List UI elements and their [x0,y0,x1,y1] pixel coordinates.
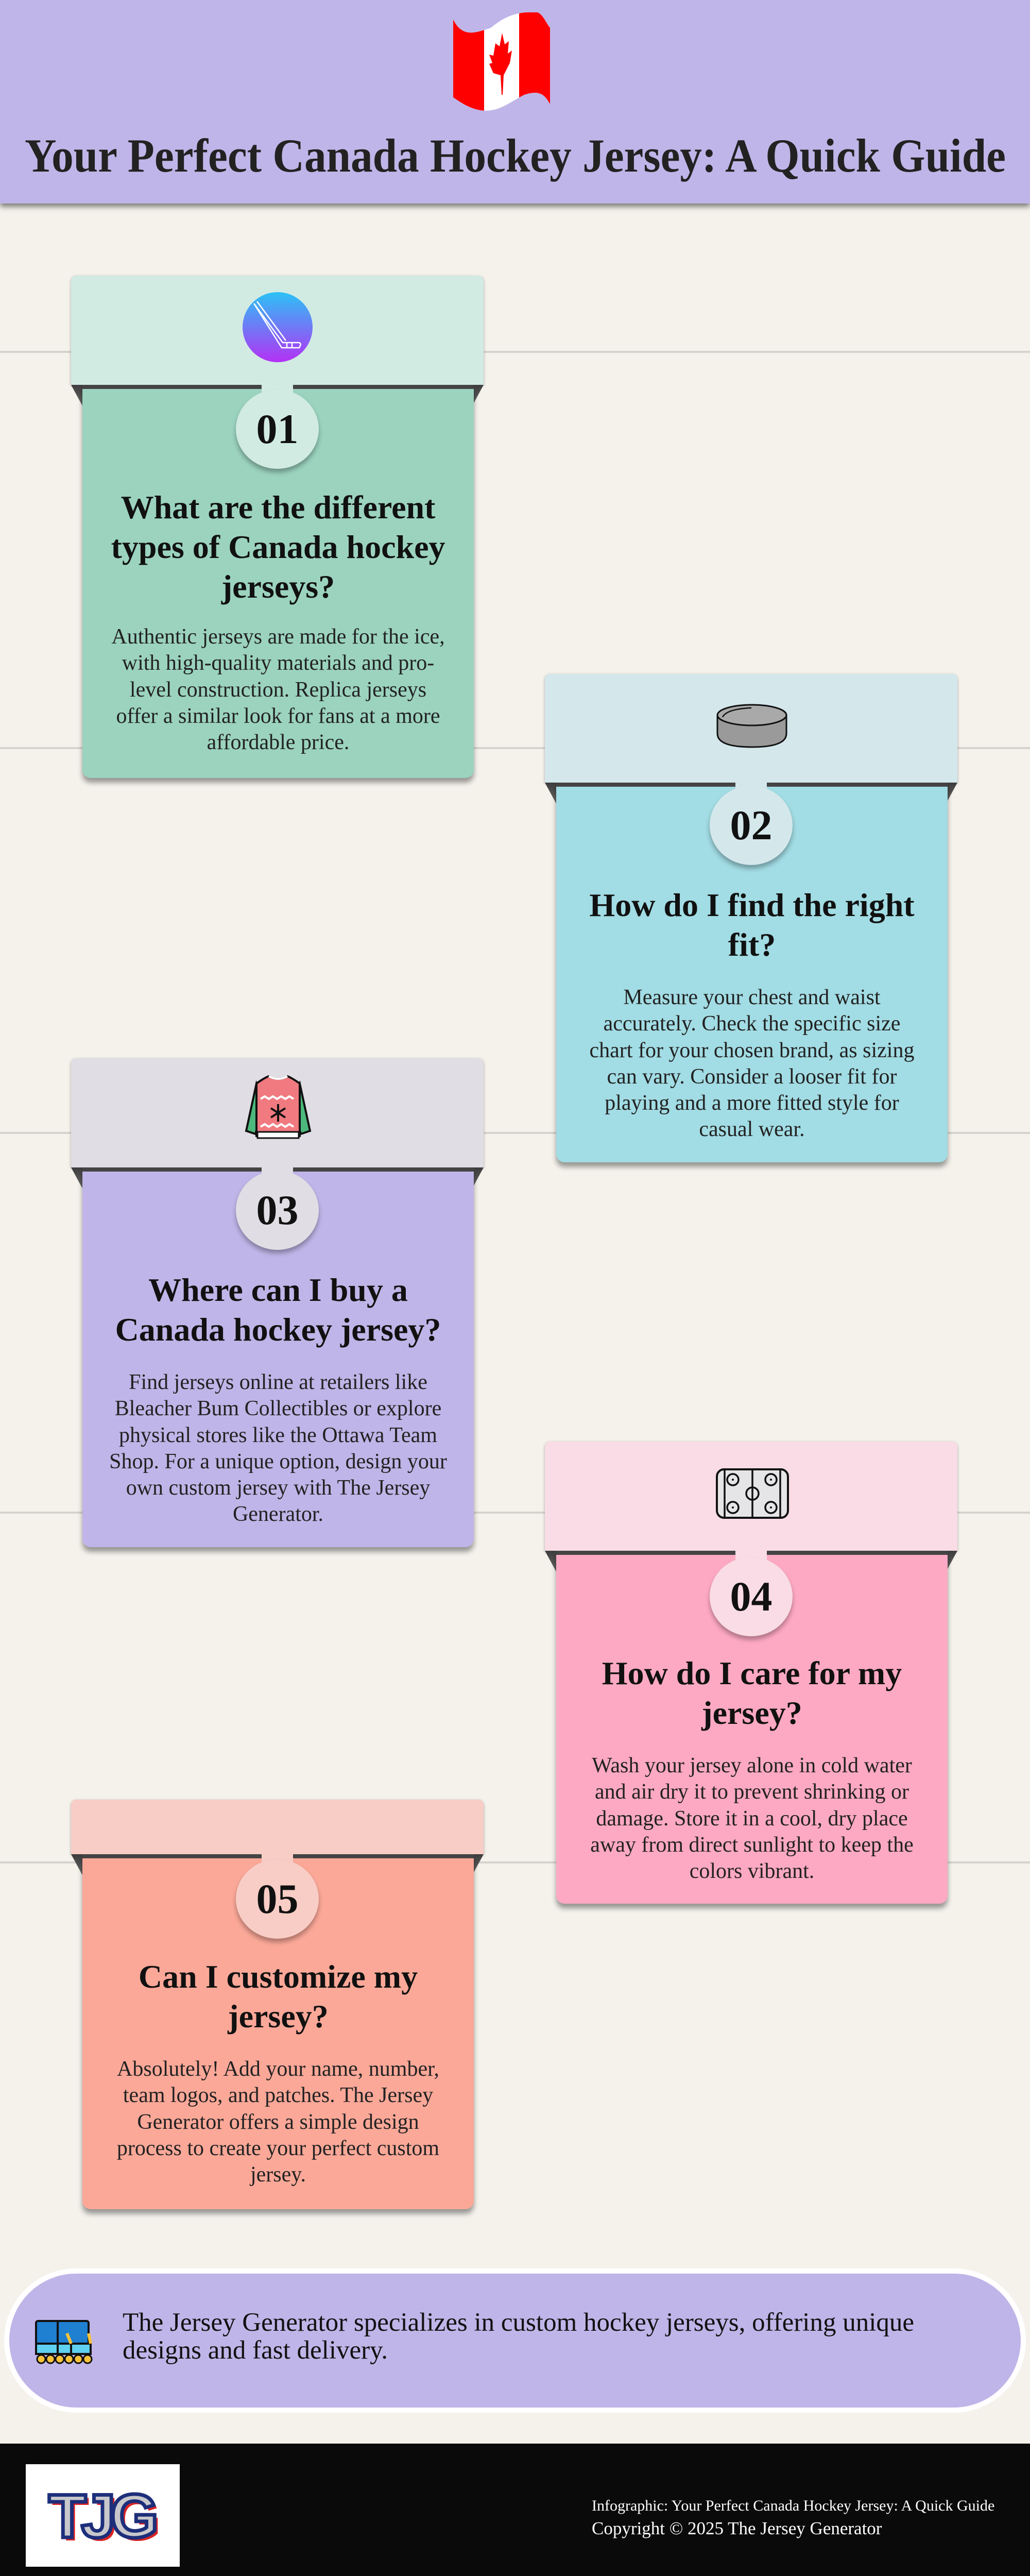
text block: Find jerseys online at retailers like [129,1370,427,1394]
heading: Can I customize my [139,1958,418,1995]
text block: chart for your chosen brand, as sizing [590,1039,914,1062]
number badge 05 [236,1859,319,1939]
heading [139,1958,418,2035]
heading: jerseys? [221,568,335,605]
heading: jersey? [228,1998,329,2035]
heading: How do I find the right [589,887,915,923]
text block: Shop. For a unique option, design your [109,1450,447,1473]
heading: fit? [728,926,776,963]
number badge 02 [710,786,793,865]
heading: Canada hockey jersey? [115,1311,441,1348]
heading [111,489,445,605]
text block: Bleacher Bum Collectibles or explore [115,1397,441,1420]
number badge 03 [236,1171,319,1250]
text block: can vary. Consider a looser fit for [607,1065,897,1089]
text block [117,2057,439,2187]
number badge 02: 02 [730,802,772,849]
text block: away from direct sunlight to keep the [590,1833,914,1857]
number badge 03: 03 [256,1187,299,1233]
text block: with high-quality materials and pro- [122,651,434,675]
text block: physical stores like the Ottawa Team [119,1423,437,1447]
number badge 01 [236,389,319,469]
footer text: Infographic: Your Perfect Canada Hockey Jersey: A Quick Guide [592,2497,994,2514]
text block: casual wear. [699,1117,805,1141]
icon: skates [35,2320,93,2364]
number badge 04 [710,1557,793,1636]
footer text: Copyright © 2025 The Jersey Generator [592,2518,882,2538]
icon: sweater [245,1075,311,1139]
logo: TJG [48,2482,154,2551]
text block: team logos, and patches. The Jersey [123,2083,433,2107]
text block: designs and fast delivery. [123,2336,388,2365]
logo [26,2464,180,2567]
text block [123,2308,914,2365]
text block: The Jersey Generator specializes in custom hockey jerseys, offering unique [123,2308,914,2337]
text block: Measure your chest and waist [623,986,881,1009]
heading [602,1655,902,1731]
text block: level construction. Replica jerseys [130,678,426,702]
text block: damage. Store it in a cool, dry place [596,1807,908,1831]
header banner [0,0,1030,204]
icon: hockey rink [716,1468,789,1519]
text block [109,1370,447,1526]
text block: Authentic jerseys are made for the ice, [111,625,445,649]
text block: Generator. [233,1502,323,1526]
number badge 05: 05 [256,1875,299,1922]
text block [590,986,914,1141]
text block: playing and a more fitted style for [605,1091,899,1115]
panel: card 03 where to buy [69,1057,485,1555]
text block: affordable price. [207,731,349,754]
text block: own custom jersey with The Jersey [126,1476,430,1500]
footer text [592,2497,994,2538]
text block: Absolutely! Add your name, number, [117,2057,439,2081]
heading: What are the different [121,489,435,526]
footer [0,2444,1030,2576]
text block: and air dry it to prevent shrinking or [595,1780,909,1804]
icon: hockey stick [243,292,313,362]
panel: card 04 care [543,1440,959,1911]
panel: card 05 customize [69,1799,485,2217]
text block [111,625,445,754]
number badge 01: 01 [256,405,299,452]
text block [590,1754,914,1883]
icon: Canada flag [453,12,550,111]
text block: Generator offers a simple design [137,2110,419,2134]
callout: Jersey Generator summary [4,2268,1026,2413]
heading: jersey? [701,1694,802,1731]
text block: jersey. [250,2163,306,2187]
number badge 04: 04 [730,1573,772,1620]
heading: How do I care for my [602,1655,902,1691]
heading: Where can I buy a [148,1272,408,1308]
panel: card 02 right fit [543,673,959,1171]
logo: TJG [52,2485,158,2554]
heading [115,1272,441,1348]
text block: Wash your jersey alone in cold water [592,1754,912,1777]
heading [589,887,915,963]
text block: process to create your perfect custom [117,2137,439,2160]
text block: offer a similar look for fans at a more [116,704,440,728]
panel: card 01 types of jerseys [69,275,485,786]
heading: types of Canada hockey [111,529,445,565]
text block: accurately. Check the specific size [604,1012,900,1036]
text block: colors vibrant. [690,1859,814,1883]
icon: hockey puck [717,704,787,748]
